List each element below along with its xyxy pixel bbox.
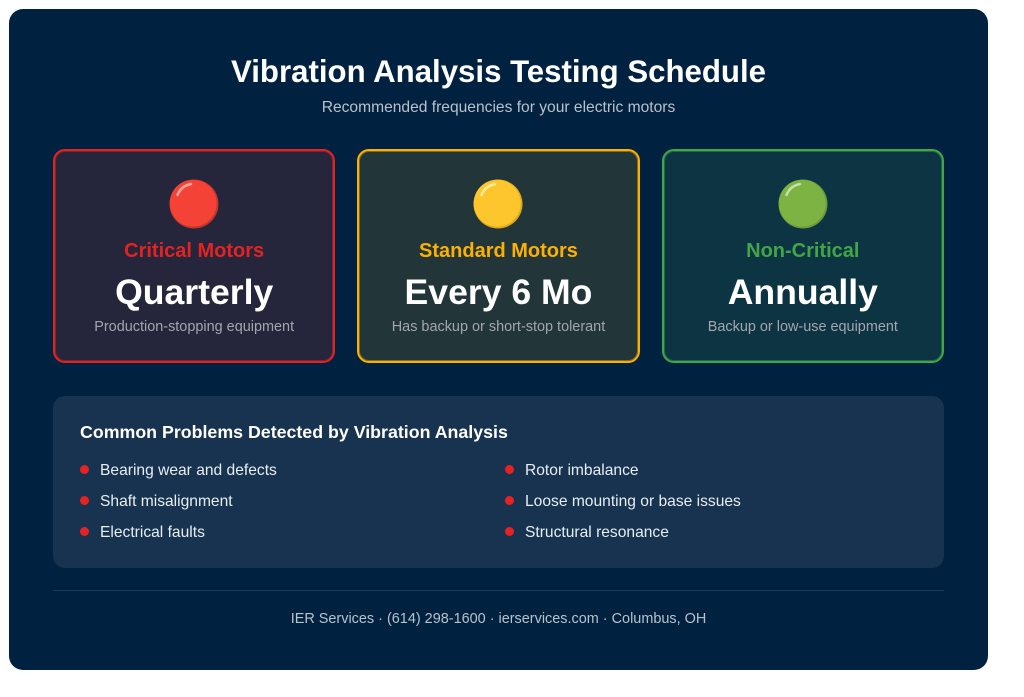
subtitle: Recommended frequencies for your electric motors: [322, 99, 675, 116]
frequency: Every 6 Mo: [405, 272, 592, 312]
icon: red circle: [170, 180, 218, 228]
list item: Shaft misalignment: [100, 493, 233, 510]
description: Has backup or short-stop tolerant: [392, 318, 605, 334]
label: Standard Motors: [419, 240, 578, 262]
description: Production-stopping equipment: [94, 318, 294, 334]
panel: non-critical motors: [662, 149, 944, 363]
description: Backup or low-use equipment: [708, 318, 898, 334]
title: Vibration Analysis Testing Schedule: [231, 54, 766, 89]
panel: standard motors: [357, 149, 640, 363]
list item: Bearing wear and defects: [100, 462, 277, 479]
frequency: Quarterly: [115, 272, 273, 312]
panel: critical motors: [53, 149, 335, 363]
label: Critical Motors: [124, 240, 264, 262]
list item: Loose mounting or base issues: [525, 493, 741, 510]
footer: IER Services · (614) 298-1600 · ierservices.com · Columbus, OH: [291, 610, 706, 626]
list item: Electrical faults: [100, 524, 205, 541]
panel: common problems: [53, 396, 944, 568]
icon: yellow circle: [474, 180, 522, 228]
heading: Common Problems Detected by Vibration Analysis: [80, 422, 508, 442]
label: Non-Critical: [746, 240, 859, 262]
list item: Rotor imbalance: [525, 462, 639, 479]
icon: green circle: [778, 180, 828, 228]
frequency: Annually: [728, 272, 878, 312]
list item: Structural resonance: [525, 524, 669, 541]
